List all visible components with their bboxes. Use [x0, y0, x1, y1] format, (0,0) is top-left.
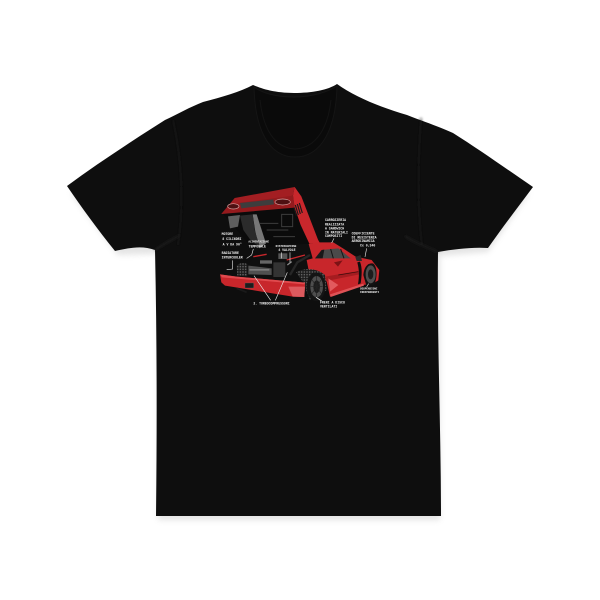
engine bay	[237, 244, 310, 283]
annotation: sospensioni: SOSPENSIONI	[360, 287, 378, 290]
annotation: coefficiente: AERODINAMICA	[352, 239, 375, 243]
neck collar	[254, 86, 337, 157]
rear bumper	[220, 274, 305, 297]
t-shirt drop shadow	[70, 192, 530, 520]
annotation: motore: MOTORE	[222, 232, 233, 236]
annotation: freni: VENTILATI	[320, 305, 337, 309]
annotation: distribuzione: DISTRIBUZIONE	[276, 245, 297, 248]
annotation: carrozzeria: REALIZZATA	[325, 222, 344, 226]
rear wheel	[296, 269, 327, 301]
annotation: alimentazione	[247, 241, 269, 258]
annotation: alimentazione: ALIMENTAZIONE	[248, 241, 269, 244]
annotation: turbocompressori	[253, 272, 290, 306]
annotation: carrozzeria	[325, 218, 348, 243]
annotation: radiatore	[222, 251, 243, 270]
annotation: coefficiente	[352, 231, 377, 257]
engine cover interior	[223, 208, 319, 250]
raised rear bonnet	[221, 187, 320, 244]
annotation: carrozzeria: COMPOSITI	[325, 234, 342, 238]
annotation: sospensioni	[360, 284, 380, 294]
annotation: radiatore: INTERCOOLER	[222, 255, 243, 259]
annotation: radiatore: RADIATORE	[222, 251, 239, 255]
annotation: coefficiente: DI RESISTENZA	[352, 235, 377, 239]
annotation: coefficiente: COEFFICIENTE	[352, 231, 375, 235]
annotation: motore: 8 CILINDRI	[222, 237, 242, 241]
front wheel	[363, 263, 377, 287]
annotation: freni	[316, 297, 345, 309]
car body side	[307, 242, 379, 297]
annotation: turbocompressori: 2. TURBOCOMPRESSORI	[253, 302, 290, 306]
annotation: motore: A V DA 90°	[223, 243, 242, 247]
t-shirt body	[67, 84, 533, 516]
annotation: alimentazione: TEMPORALE	[249, 244, 266, 248]
annotation: distribuzione	[276, 245, 297, 262]
annotation: carrozzeria: IN MATERIALI	[325, 230, 348, 234]
annotation: sospensioni: INDIPENDENTI	[360, 291, 380, 294]
annotation: carrozzeria: A SANDWICH	[325, 226, 344, 230]
annotation: motore	[222, 232, 242, 247]
car illustration	[220, 187, 380, 309]
annotation: distribuzione: 4 VALVOLE	[278, 248, 296, 252]
annotation: carrozzeria: CARROZZERIA	[325, 218, 346, 222]
annotation: coefficiente: Cx 0,340	[360, 243, 375, 247]
annotation: freni: FRENI A DISCO	[320, 301, 345, 305]
